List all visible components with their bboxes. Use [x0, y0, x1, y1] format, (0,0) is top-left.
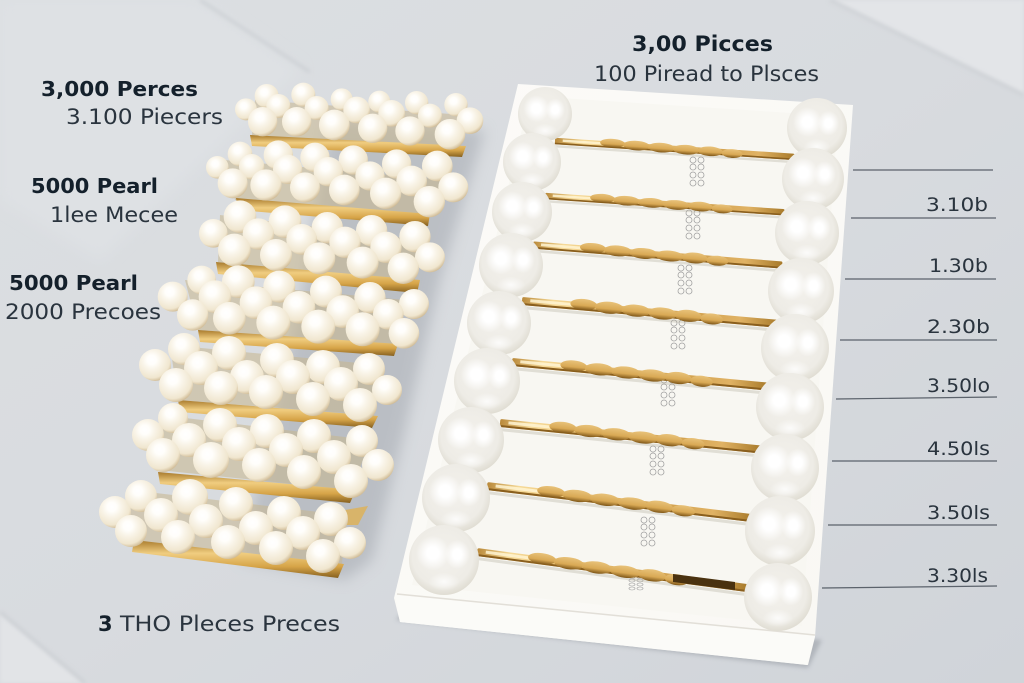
tray shadow: [396, 590, 822, 668]
bottom label: THO Pleces Preces: [119, 612, 340, 636]
left label 2: [31, 174, 178, 227]
shadow under left pearl clips: [240, 120, 485, 580]
printed marks on card: [629, 157, 704, 590]
left label 2: 5000 Pearl: [31, 174, 158, 198]
large pearls left column: [409, 87, 572, 595]
bottom label: 3: [98, 612, 113, 636]
weight labels: 3.30ls: [927, 565, 988, 587]
tray inner floor: [412, 96, 838, 626]
panel: stack of pearl clips: [99, 83, 483, 578]
top right heading: [594, 32, 819, 86]
weight labels: [926, 194, 990, 587]
weight labels: 3.50ls: [927, 502, 990, 524]
left label 1: 3.100 Piecers: [66, 105, 223, 129]
left label 3: 5000 Pearl: [9, 271, 138, 295]
clip 7 gold bar: [132, 540, 344, 578]
weight labels: 4.50ls: [927, 438, 990, 460]
dark reflection on last pin: [673, 574, 735, 590]
large pearls right column: [744, 98, 847, 631]
clip 7 end plate: [345, 506, 368, 525]
left label 1: 3,000 Perces: [41, 77, 198, 101]
gold hair pins: [476, 135, 795, 596]
clip 6 gold bar: [158, 472, 356, 503]
tray front lip: [395, 595, 815, 665]
clip 2 gold bar: [236, 198, 430, 226]
left label 2: 1lee Mecee: [50, 203, 178, 227]
clip 3 gold bar: [216, 262, 420, 293]
clip 1 gold bar: [250, 135, 466, 157]
weight labels: 1.30b: [929, 255, 988, 277]
clip 4 gold bar: [198, 330, 398, 356]
clip 5 gold bar: [178, 400, 378, 428]
top right heading: 100 Piread to Plsces: [594, 62, 819, 86]
top right heading: 3,00 Picces: [632, 32, 773, 56]
pearl clips 1 to 4: [158, 83, 483, 349]
weight labels: 2.30b: [927, 316, 990, 338]
tray body: [394, 84, 853, 665]
callout leader lines: [822, 170, 997, 588]
left label 1: [41, 77, 223, 129]
weight labels: 3.50lo: [927, 375, 990, 397]
panel: white tray with large pearl pins: [394, 84, 853, 668]
weight labels: 3.10b: [926, 194, 988, 216]
pearl clips 5 to 7: [99, 333, 402, 573]
left label 3: [5, 271, 161, 324]
left label 3: 2000 Precoes: [5, 300, 161, 324]
clip backing plates: [130, 100, 465, 565]
